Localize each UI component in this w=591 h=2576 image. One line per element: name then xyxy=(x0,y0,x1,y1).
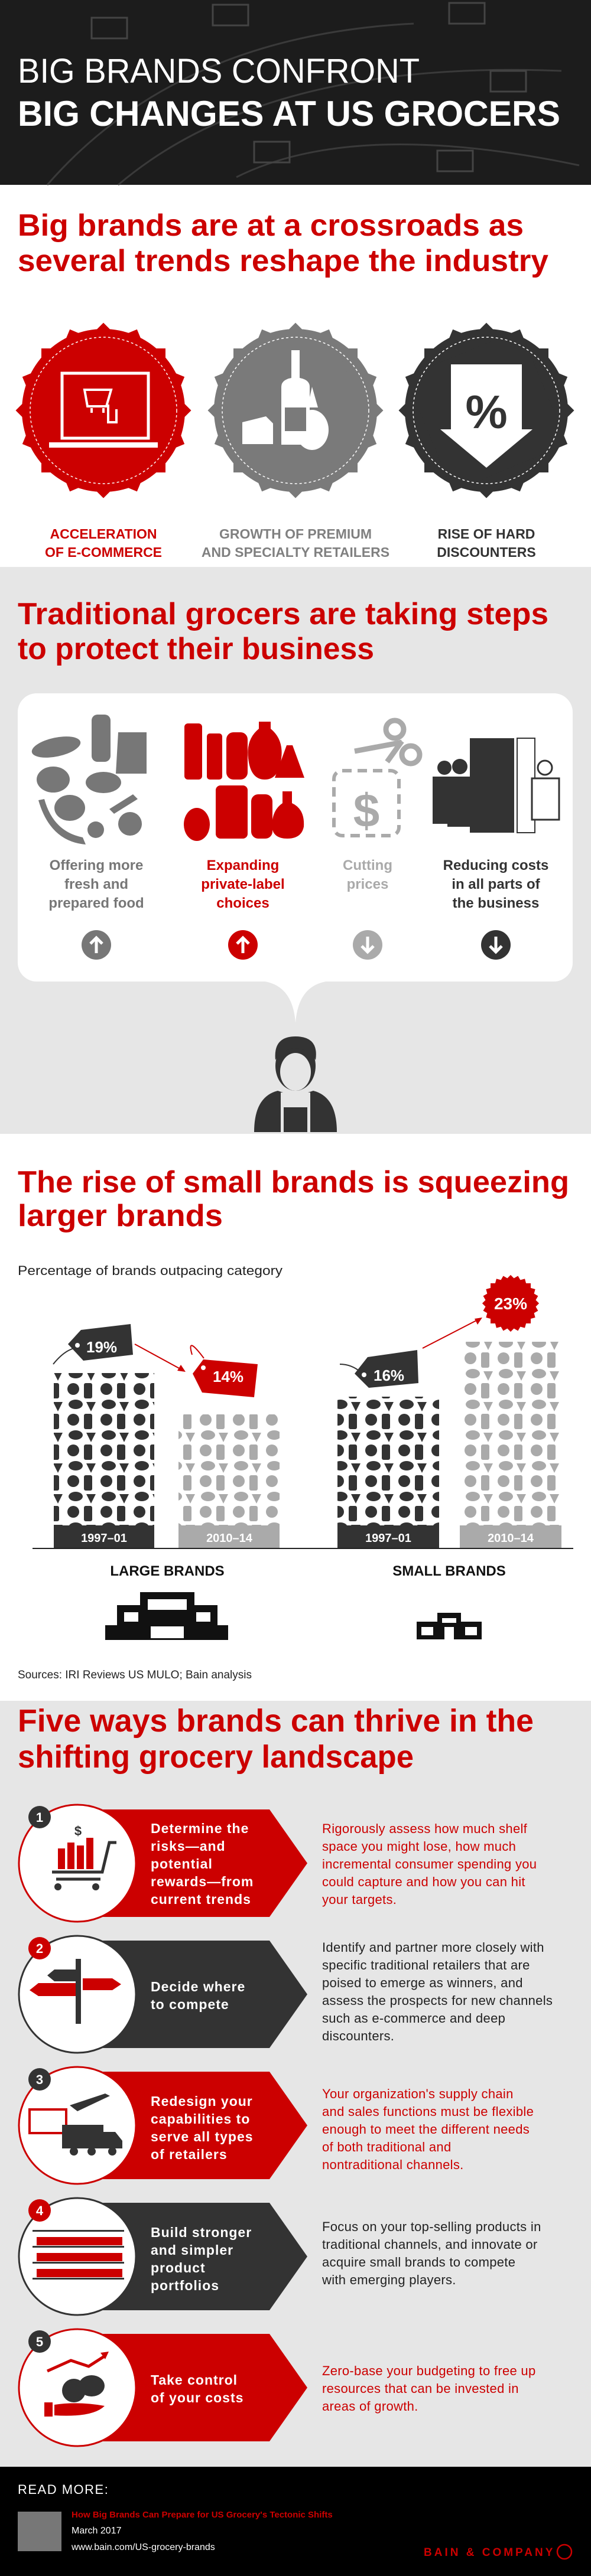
badge number 1 xyxy=(28,1806,51,1828)
bar: small 1997-01: 1997–01 xyxy=(365,1532,411,1545)
column labels xyxy=(48,857,548,911)
badge number 3: 3 xyxy=(36,2072,43,2087)
heading: small brands: larger brands xyxy=(18,1199,223,1233)
row 2: assess the prospects for new channels xyxy=(322,1993,553,2008)
icon: product shelves xyxy=(33,2230,124,2280)
row 1: Rigorously assess how much shelf xyxy=(322,1821,528,1836)
badge labels: AND SPECIALTY RETAILERS xyxy=(202,544,389,560)
speech bubble panel xyxy=(18,693,573,1023)
tag: 19% xyxy=(53,1324,133,1364)
icon: scissors and dollar: $ xyxy=(353,784,379,837)
icon: large store xyxy=(105,1592,228,1640)
footer xyxy=(0,2467,591,2576)
row 1 xyxy=(19,1805,537,1922)
column labels: the business xyxy=(453,895,539,911)
row 1: potential xyxy=(151,1856,213,1871)
icon: hand with coins xyxy=(44,2352,109,2417)
column labels: fresh and xyxy=(64,876,128,892)
arrow: rise xyxy=(423,1318,482,1348)
icon: fresh food xyxy=(30,715,147,844)
row 3: enough to meet the different needs xyxy=(322,2122,530,2137)
column labels: prepared food xyxy=(48,895,144,911)
row 3: nontraditional channels. xyxy=(322,2157,464,2172)
icon: cart with chart xyxy=(58,1838,93,1869)
heading: crossroads: several trends reshape the industry xyxy=(18,244,548,278)
row 2: discounters. xyxy=(322,2029,394,2043)
row 3: of both traditional and xyxy=(322,2140,452,2154)
row 5: areas of growth. xyxy=(322,2399,418,2414)
row 5: resources that can be invested in xyxy=(322,2381,519,2396)
row 3: serve all types xyxy=(151,2129,254,2144)
thumbnail xyxy=(18,2512,61,2551)
row 4: and simpler xyxy=(151,2242,233,2258)
row 1: space you might lose, how much xyxy=(322,1839,516,1854)
badge number 5: 5 xyxy=(36,2334,43,2349)
badge number 4: 4 xyxy=(36,2203,44,2218)
heading: traditional grocers: Traditional grocers are taking steps xyxy=(18,597,548,631)
badge number 5 xyxy=(28,2330,51,2353)
icon: supply chain xyxy=(30,2094,122,2156)
heading: crossroads xyxy=(18,208,548,278)
badge number 2 xyxy=(28,1937,51,1959)
row 5 xyxy=(19,2329,536,2446)
column labels: Offering more xyxy=(50,857,143,873)
row 5: of your costs xyxy=(151,2390,243,2405)
row 2: poised to emerge as winners, and xyxy=(322,1975,523,1990)
row 5: Take control xyxy=(151,2372,238,2388)
read more heading: READ MORE: xyxy=(18,2482,109,2497)
section: traditional grocers xyxy=(0,567,591,1134)
bar: small 1997-01 xyxy=(337,1397,439,1548)
article link: March 2017 xyxy=(72,2526,122,2536)
row 4: with emerging players. xyxy=(322,2272,456,2287)
badge number 4 xyxy=(28,2199,51,2222)
icon: grocer person xyxy=(254,1036,337,1132)
row 4: product xyxy=(151,2260,206,2275)
chart subtitle: Percentage of brands outpacing category xyxy=(18,1263,282,1278)
row 1: current trends xyxy=(151,1892,251,1907)
badge: hard discounters: % xyxy=(465,386,508,438)
row 3: and sales functions must be flexible xyxy=(322,2104,534,2119)
icon: small store xyxy=(417,1613,482,1639)
column labels: Reducing costs xyxy=(443,857,548,873)
starburst: 23%: 23% xyxy=(494,1294,527,1313)
bar: large 2010-14 xyxy=(178,1414,280,1548)
logo: Bain & Company: BAIN & COMPANY xyxy=(424,2546,555,2559)
heading: five ways xyxy=(18,1703,534,1775)
starburst: 23% xyxy=(482,1275,539,1332)
row 2 xyxy=(19,1936,553,2053)
arrow icons xyxy=(82,930,511,960)
tag: 16% xyxy=(340,1350,418,1388)
icon: laptop with cart xyxy=(62,373,148,438)
row 4: Build stronger xyxy=(151,2225,252,2240)
column labels: Cutting xyxy=(343,857,392,873)
row 2: Decide where xyxy=(151,1979,245,1994)
article link: www.bain.com/US-grocery-brands xyxy=(71,2542,215,2552)
header banner xyxy=(0,0,591,185)
tag: 16%: 16% xyxy=(374,1367,404,1384)
badge: premium retailers xyxy=(208,323,383,498)
column labels: in all parts of xyxy=(452,876,541,892)
tag: 19%: 19% xyxy=(86,1338,117,1356)
heading: small brands: The rise of small brands is squeezing xyxy=(18,1165,569,1199)
column labels: prices xyxy=(347,876,388,892)
badge: hard discounters xyxy=(399,323,574,498)
icon: wine cheese pineapple xyxy=(242,350,329,450)
row 3: capabilities to xyxy=(151,2111,250,2127)
row 1: incremental consumer spending you xyxy=(322,1857,537,1871)
title: BIG CHANGES AT US GROCERS xyxy=(18,94,560,133)
label: large brands: LARGE BRANDS xyxy=(110,1563,225,1579)
badge number 3 xyxy=(28,2068,51,2091)
row 4: traditional channels, and innovate or xyxy=(322,2237,538,2252)
badge: e-commerce xyxy=(16,323,191,498)
icon: signpost xyxy=(30,1959,121,2024)
chart: brands outpacing category xyxy=(18,1275,573,1681)
row 1: your targets. xyxy=(322,1892,397,1907)
column labels: choices xyxy=(216,895,269,911)
badge labels: OF E-COMMERCE xyxy=(45,544,162,560)
heading: five ways: Five ways brands can thrive in the xyxy=(18,1703,534,1739)
row 3: Redesign your xyxy=(151,2094,253,2109)
heading: small brands xyxy=(18,1165,569,1233)
bar: small 2010-14 xyxy=(460,1342,561,1548)
row 1: risks—and xyxy=(151,1838,226,1854)
icon: private label bottles xyxy=(184,722,304,841)
arrow: decline xyxy=(135,1344,186,1372)
row 1: Determine the xyxy=(151,1821,249,1836)
bar: small 2010-14: 2010–14 xyxy=(488,1532,534,1545)
badge labels xyxy=(45,526,536,560)
column labels: Expanding xyxy=(207,857,279,873)
row 2: Identify and partner more closely with xyxy=(322,1940,544,1955)
row 4 xyxy=(19,2198,541,2315)
tag: 14%: 14% xyxy=(213,1368,243,1385)
row 1: could capture and how you can hit xyxy=(322,1874,525,1889)
row 2: to compete xyxy=(151,1997,229,2012)
title: BIG BRANDS CONFRONT xyxy=(18,52,420,90)
badge number 2: 2 xyxy=(36,1941,43,1956)
icon: staff and shelves xyxy=(433,738,559,833)
row 2: specific traditional retailers that are xyxy=(322,1958,530,1972)
column labels: private-label xyxy=(201,876,285,892)
article link: How Big Brands Can Prepare for US Grocery's Tectonic Shifts xyxy=(72,2510,333,2520)
label: small brands: SMALL BRANDS xyxy=(392,1563,506,1579)
bar: large 1997-01: 1997–01 xyxy=(81,1532,127,1545)
bar: large 2010-14: 2010–14 xyxy=(206,1532,253,1545)
heading: traditional grocers: to protect their business xyxy=(18,632,374,666)
row 2: such as e-commerce and deep xyxy=(322,2011,505,2026)
heading: crossroads: Big brands are at a crossroads as xyxy=(18,208,524,243)
row 1: rewards—from xyxy=(151,1874,254,1889)
title xyxy=(18,52,560,133)
badge labels: GROWTH OF PREMIUM xyxy=(219,526,372,542)
row 3: Your organization's supply chain xyxy=(322,2086,514,2101)
badge labels: ACCELERATION xyxy=(50,526,157,542)
tag: 14% xyxy=(190,1345,258,1397)
row 5: Zero-base your budgeting to free up xyxy=(322,2363,536,2378)
row 4: acquire small brands to compete xyxy=(322,2255,515,2270)
row 3: of retailers xyxy=(151,2147,228,2162)
bar: large 1997-01 xyxy=(54,1373,154,1548)
row 1: $ xyxy=(74,1824,82,1838)
row 4: Focus on your top-selling products in xyxy=(322,2219,541,2234)
sources: Sources: IRI Reviews US MULO; Bain analysis xyxy=(18,1669,252,1681)
heading: five ways: shifting grocery landscape xyxy=(18,1739,414,1775)
icon: scissors and dollar xyxy=(334,720,420,837)
badge labels: DISCOUNTERS xyxy=(437,544,536,560)
icon: down arrow percent xyxy=(440,364,532,468)
row 3 xyxy=(19,2067,534,2184)
article link xyxy=(71,2510,333,2552)
section: five ways xyxy=(0,1701,591,2467)
heading: traditional grocers xyxy=(18,597,548,666)
row 4: portfolios xyxy=(151,2278,219,2293)
badge number 1: 1 xyxy=(36,1810,43,1825)
badge labels: RISE OF HARD xyxy=(438,526,535,542)
